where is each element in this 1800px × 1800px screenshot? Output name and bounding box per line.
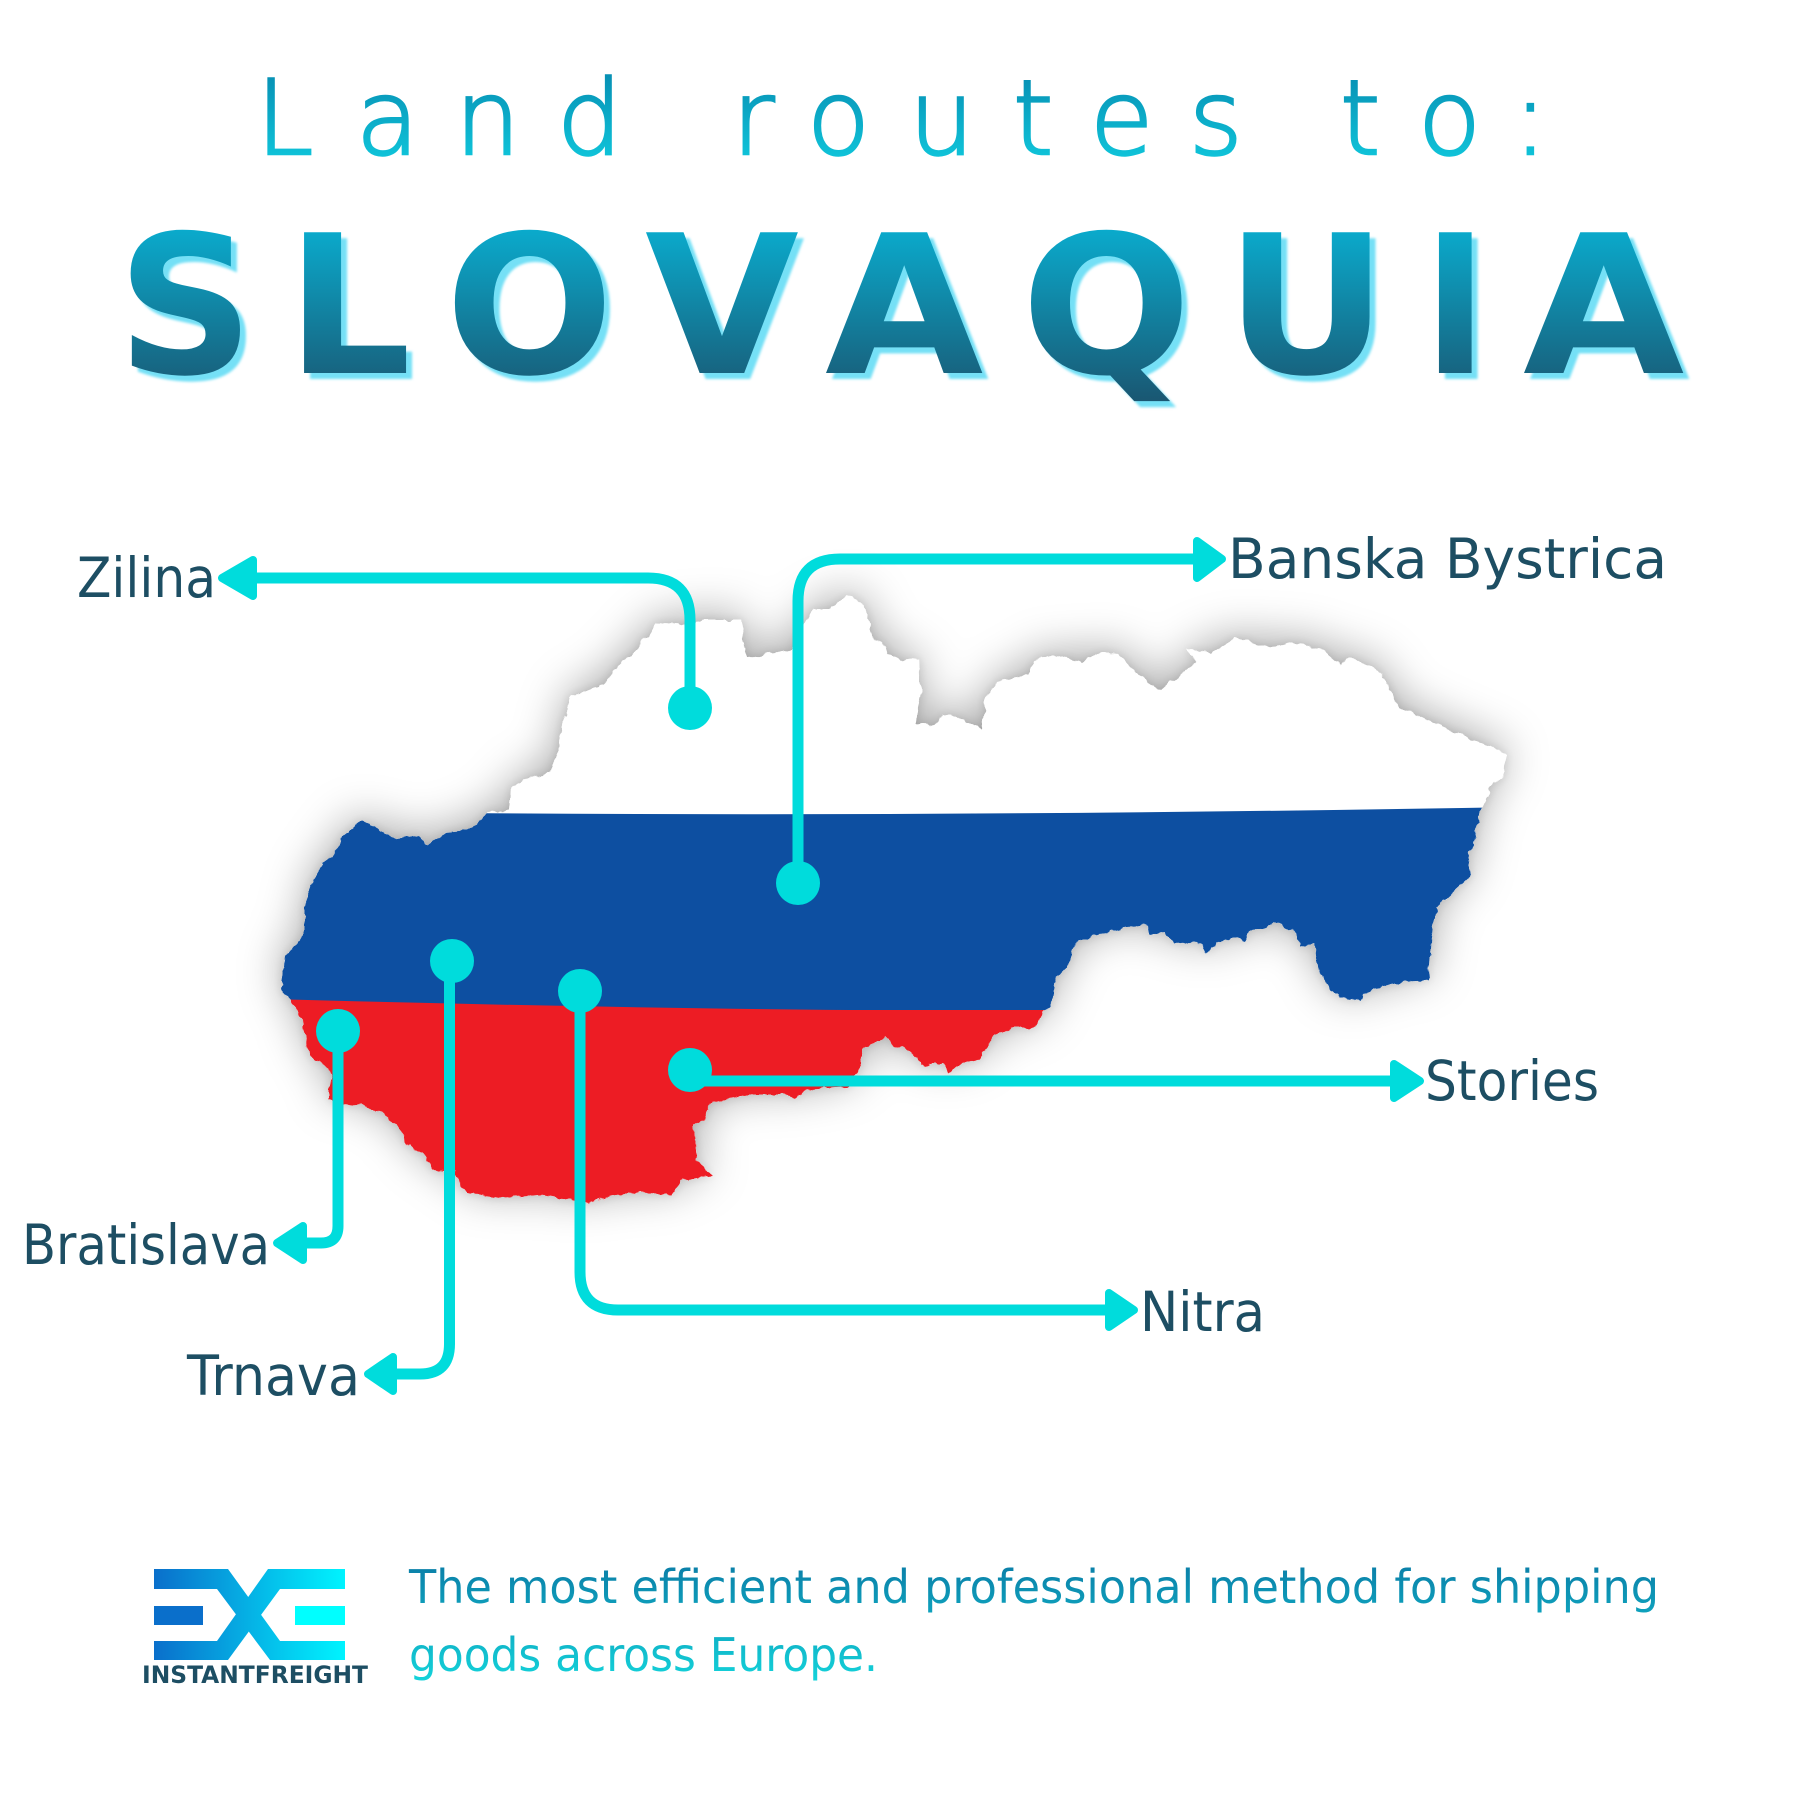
label: Bratislava: Bratislava bbox=[22, 1213, 270, 1277]
title: SLOVAQUIA: O bbox=[445, 195, 614, 419]
title: SLOVAQUIA: S bbox=[117, 195, 254, 419]
title: SLOVAQUIA: L bbox=[292, 200, 417, 425]
route: Nitra bbox=[558, 969, 1134, 1327]
title: SLOVAQUIA: V bbox=[645, 195, 799, 419]
title: SLOVAQUIA: Q bbox=[1027, 201, 1198, 425]
label: Stories: Stories bbox=[1425, 1049, 1599, 1113]
label: Trnava: Trnava bbox=[186, 1344, 360, 1408]
map of Slovakia in flag colours bbox=[270, 594, 1520, 1240]
route: Trnava bbox=[368, 939, 474, 1391]
title: SLOVAQUIA: I bbox=[1423, 195, 1488, 419]
title: SLOVAQUIA: A bbox=[825, 193, 983, 419]
label: Nitra: Nitra bbox=[1140, 1280, 1265, 1344]
logo: EXE InstantFreight bbox=[142, 1569, 369, 1689]
tagline: goods across Europe. bbox=[409, 1628, 878, 1682]
tagline bbox=[408, 1560, 1659, 1682]
tagline: The most efficient and professional method for shipping bbox=[408, 1560, 1659, 1614]
title: SLOVAQUIA: A bbox=[1529, 201, 1690, 425]
route: Bratislava bbox=[277, 1009, 360, 1260]
title: SLOVAQUIA: I bbox=[1429, 201, 1494, 425]
title: SLOVAQUIA: U bbox=[1225, 195, 1388, 419]
route: Zilina bbox=[222, 560, 712, 730]
route: Banska Bystrica bbox=[776, 541, 1222, 905]
title: SLOVAQUIA: L bbox=[286, 194, 411, 419]
title: Land routes to: Land routes to: bbox=[256, 59, 1548, 179]
title: SLOVAQUIA: A bbox=[831, 199, 989, 425]
route: Stories bbox=[668, 1048, 1420, 1098]
logo: EXE InstantFreight: INSTANTFREIGHT bbox=[142, 1661, 369, 1689]
title: SLOVAQUIA: Q bbox=[1021, 195, 1192, 419]
title: SLOVAQUIA: A bbox=[1523, 195, 1684, 419]
title: SLOVAQUIA: O bbox=[451, 201, 620, 425]
label: Zilina: Zilina bbox=[77, 546, 216, 610]
label: Banska Bystrica: Banska Bystrica bbox=[1228, 527, 1667, 591]
title: SLOVAQUIA: S bbox=[123, 201, 260, 425]
title: SLOVAQUIA: U bbox=[1231, 201, 1394, 425]
title: SLOVAQUIA: V bbox=[651, 201, 805, 425]
title: SLOVAQUIA bbox=[117, 193, 1690, 425]
